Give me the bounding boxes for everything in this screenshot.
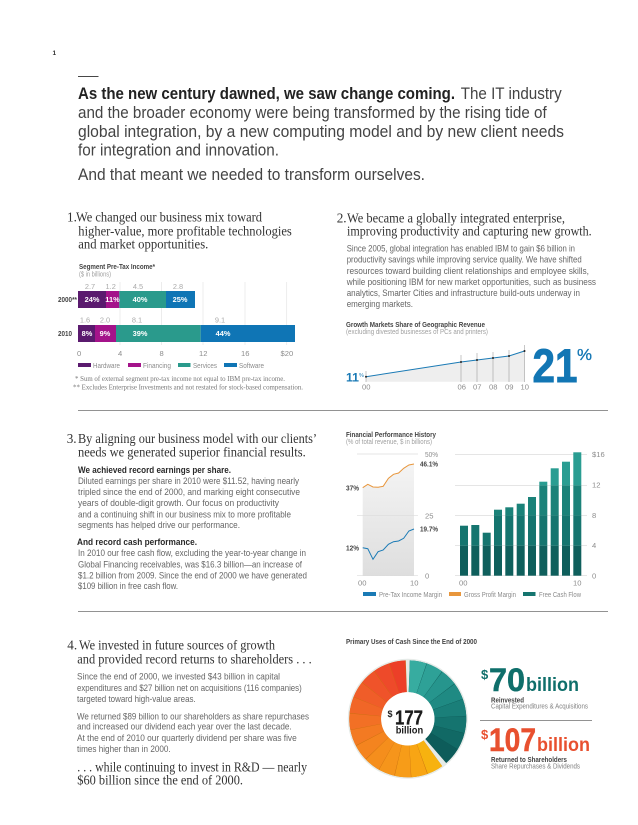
section 1 heading [67, 210, 292, 252]
section 4 heading: 4. [67, 637, 77, 652]
section 2 heading [337, 210, 592, 238]
segment pre-tax income chart: 9.1 [215, 316, 225, 324]
growth markets line chart: 06 [458, 382, 466, 392]
growth markets line chart: 09 [505, 382, 513, 392]
segment pre-tax income chart: ($ in billions) [79, 270, 111, 278]
section 3 cash text: Global Financing receivables, was $16.3 billion—an increase of [78, 559, 302, 569]
section 4 heading: and provided record returns to shareholders . . . [77, 652, 312, 666]
segment pre-tax income chart: 4.5 [133, 282, 143, 291]
section 2 body text: emerging markets. [347, 299, 413, 309]
callout: 70 billion reinvested: Reinvested [491, 696, 524, 704]
section 2 heading: 2. [337, 210, 347, 225]
growth markets line chart [346, 320, 592, 392]
segment pre-tax income chart: Financing [143, 361, 171, 370]
cash donut chart: $ [388, 709, 393, 719]
financial chart legend [363, 590, 581, 599]
free cash flow bar chart: 8 [592, 511, 596, 520]
free cash flow bar chart: $16 [592, 450, 605, 459]
section 3 cash text: And record cash performance. [77, 537, 197, 547]
section 2 heading: We became a globally integrated enterprise, [347, 210, 565, 225]
callout: 107 billion returned: 107 [489, 722, 536, 758]
segment pre-tax income chart: 2.0 [100, 316, 110, 324]
chart 1 footnotes: ** Excludes Enterprise Investments and not restated for stock-based compensation. [73, 384, 303, 392]
callout: 70 billion reinvested: Capital Expenditures & Acquisitions [491, 702, 588, 710]
callout: 107 billion returned: Share Repurchases & Dividends [491, 762, 580, 770]
free cash flow bar chart: 00 [459, 578, 467, 588]
free cash flow bar chart: 0 [592, 572, 596, 580]
section 2 body text: analytics, Smarter Cities and infrastructure build-outs underway in [347, 288, 580, 298]
section 3 earnings text: years of double-digit growth. Our focus on productivity [78, 498, 279, 508]
intro heading: And that meant we needed to transform ourselves. [78, 166, 425, 184]
section 3 heading: needs we generated superior financial results. [78, 445, 306, 460]
section 3 earnings text: Diluted earnings per share in 2010 were $11.52, having nearly [78, 476, 299, 486]
segment pre-tax income chart: 16 [241, 349, 249, 358]
callout: 70 billion reinvested: 70 [489, 662, 525, 698]
section 2 body text: Since 2005, global integration has enabled IBM to gain $6 billion in [347, 244, 575, 254]
growth markets line chart: 07 [473, 382, 481, 392]
intro heading: for integration and innovation. [78, 142, 279, 160]
segment pre-tax income chart: 11% [105, 295, 120, 304]
free cash flow bar chart: 10 [573, 578, 581, 588]
callout: 70 billion reinvested [481, 662, 588, 710]
segment pre-tax income chart: 4 [118, 349, 122, 358]
financial chart legend: Pre-Tax Income Margin [379, 590, 442, 599]
segment pre-tax income chart: 2000** [58, 295, 77, 304]
segment pre-tax income chart: 9% [100, 329, 111, 338]
section 4 heading: We invested in future sources of growth [79, 637, 275, 652]
section 4 heading [67, 637, 312, 666]
section 1 heading: and market opportunities. [78, 236, 208, 252]
margin line chart: 12% [346, 544, 359, 552]
section 1 heading: higher-value, more profitable technologies [78, 224, 292, 238]
segment pre-tax income chart: 2010 [58, 329, 72, 338]
intro heading: The IT industry [461, 85, 562, 103]
section 4 body text: At the end of 2010 our quarterly dividend per share was five [77, 733, 297, 743]
margin line chart: 00 [358, 578, 366, 588]
section 1 heading: 1. [67, 210, 77, 225]
intro heading: As the new century dawned, we saw change coming. [78, 85, 455, 103]
financial chart legend: Free Cash Flow [539, 590, 581, 599]
section 3 cash text: $1.2 billion from 2009. Since the end of 2000 we have generated [78, 570, 307, 580]
section 3 cash text: $109 billion in free cash flow. [78, 581, 178, 591]
segment pre-tax income chart: 2.8 [173, 282, 183, 291]
chart 1 footnotes [73, 375, 303, 392]
growth markets line chart: 10 [520, 382, 529, 392]
segment pre-tax income chart: $20 [280, 349, 293, 358]
financial performance history title: Financial Performance History [346, 430, 436, 439]
segment pre-tax income chart: Services [193, 361, 217, 370]
section 4 body text [77, 671, 309, 754]
margin line chart: 25 [425, 512, 433, 520]
callout: 70 billion reinvested: $ [481, 667, 489, 682]
section 4 body text: and increased our dividend each year over the last decade. [77, 722, 292, 732]
section 4 body text: Since the end of 2000, we invested $43 billion in capital [77, 671, 280, 681]
segment pre-tax income chart: 0 [77, 349, 81, 358]
section 4 closing statement [77, 760, 307, 787]
section 3 heading [67, 431, 317, 460]
section 2 body text [346, 244, 596, 309]
section 4 body text: expenditures and $27 billion net on acquisitions (116 companies) [77, 683, 302, 693]
financial performance history title: (% of total revenue, $ in billions) [346, 437, 432, 446]
segment pre-tax income chart: 1.6 [80, 316, 90, 324]
section 2 body text: resources toward building client relationships and employee skills, [347, 266, 589, 276]
intro heading [78, 76, 564, 184]
cash donut chart [348, 659, 468, 779]
segment pre-tax income chart: 8 [160, 349, 164, 358]
growth markets line chart: Growth Markets Share of Geographic Revenue [346, 320, 485, 329]
margin line chart: 37% [346, 484, 359, 492]
section 2 body text: while positioning IBM for new market opportunities, such as business [346, 277, 596, 287]
section 3 earnings text: and a continuing shift in our business mix to more profitable [78, 509, 291, 519]
growth markets line chart: 21 [532, 339, 578, 392]
callout: 70 billion reinvested: billion [526, 675, 579, 696]
margin line chart: 19.7% [420, 524, 438, 534]
section 3 earnings text [78, 465, 300, 530]
financial performance history title [346, 430, 436, 446]
section 3 cash text: In 2010 our free cash flow, excluding the year-to-year change in [78, 548, 306, 558]
section 3 heading: By aligning our business model with our clients’ [78, 431, 317, 446]
section 2 heading: improving productivity and capturing new growth. [347, 224, 592, 238]
section 3 cash text [77, 537, 307, 591]
segment pre-tax income chart: 8% [82, 329, 93, 338]
margin line chart: 10 [410, 578, 418, 588]
growth markets line chart: % [359, 373, 364, 379]
callout: 107 billion returned: $ [481, 727, 489, 742]
segment pre-tax income chart: 8.1 [132, 316, 142, 324]
margin line chart: 50% [425, 450, 438, 459]
margin line chart [346, 450, 438, 588]
margin line chart: 46.1% [420, 460, 438, 468]
segment pre-tax income chart: Software [239, 361, 264, 370]
growth markets line chart: 00 [362, 382, 370, 392]
intro heading: and the broader economy were being transformed by the rising tide of [78, 104, 547, 122]
growth markets line chart: (excluding divested businesses of PCs and printers) [346, 327, 488, 336]
section 4 body text: We returned $89 billion to our shareholders as share repurchases [77, 711, 309, 721]
chart 1 footnotes: * Sum of external segment pre-tax income not equal to IBM pre-tax income. [75, 375, 285, 383]
section 1 heading: We changed our business mix toward [76, 210, 262, 225]
segment pre-tax income chart: 44% [216, 329, 231, 338]
growth markets line chart: 11 [346, 370, 359, 384]
section 2 body text: productivity savings while improving service quality. We have shifted [347, 255, 582, 265]
section 4 closing statement: . . . while continuing to invest in R&D — nearly [77, 760, 307, 775]
segment pre-tax income chart: 12 [199, 349, 207, 358]
section 3 earnings text: We achieved record earnings per share. [78, 465, 231, 475]
section 4 body text: targeted toward high-value areas. [77, 694, 196, 704]
segment pre-tax income chart: 1.2 [106, 282, 116, 291]
segment pre-tax income chart: 2.7 [85, 282, 95, 291]
section 4 body text: times higher than in 2000. [77, 744, 171, 754]
section 4 closing statement: $60 billion since the end of 2000. [77, 772, 243, 787]
section 3 earnings text: tripled since the end of 2000, and marking eight consecutive [78, 487, 300, 497]
segment pre-tax income chart: 25% [173, 295, 188, 304]
growth markets line chart: % [577, 347, 592, 364]
segment pre-tax income chart: Hardware [93, 361, 120, 370]
segment pre-tax income chart: Segment Pre-Tax Income* [79, 262, 155, 271]
section 3 heading: 3. [67, 431, 77, 446]
cash donut chart: 177 [395, 707, 423, 729]
free cash flow bar chart: 4 [592, 541, 596, 550]
financial chart legend: Gross Profit Margin [464, 590, 516, 599]
callout: 107 billion returned: Returned to Shareholders [491, 755, 567, 764]
margin line chart: 0 [425, 572, 429, 580]
callout: 107 billion returned [481, 722, 590, 770]
segment pre-tax income chart [58, 262, 295, 370]
section 3 earnings text: segments has helped drive our performance. [78, 520, 240, 530]
intro heading: global integration, by a new computing model and by new client needs [78, 123, 564, 141]
growth markets line chart: 08 [489, 382, 497, 392]
cash donut chart: billion [396, 726, 423, 736]
segment pre-tax income chart: 40% [133, 295, 148, 304]
primary uses of cash title: Primary Uses of Cash Since the End of 2000 [346, 637, 477, 646]
free cash flow bar chart: 12 [592, 480, 600, 490]
callout: 107 billion returned: billion [537, 735, 590, 756]
page number: 1 [52, 50, 56, 57]
segment pre-tax income chart: 24% [85, 295, 100, 304]
free cash flow bar chart [455, 450, 605, 588]
segment pre-tax income chart: 39% [133, 329, 148, 338]
